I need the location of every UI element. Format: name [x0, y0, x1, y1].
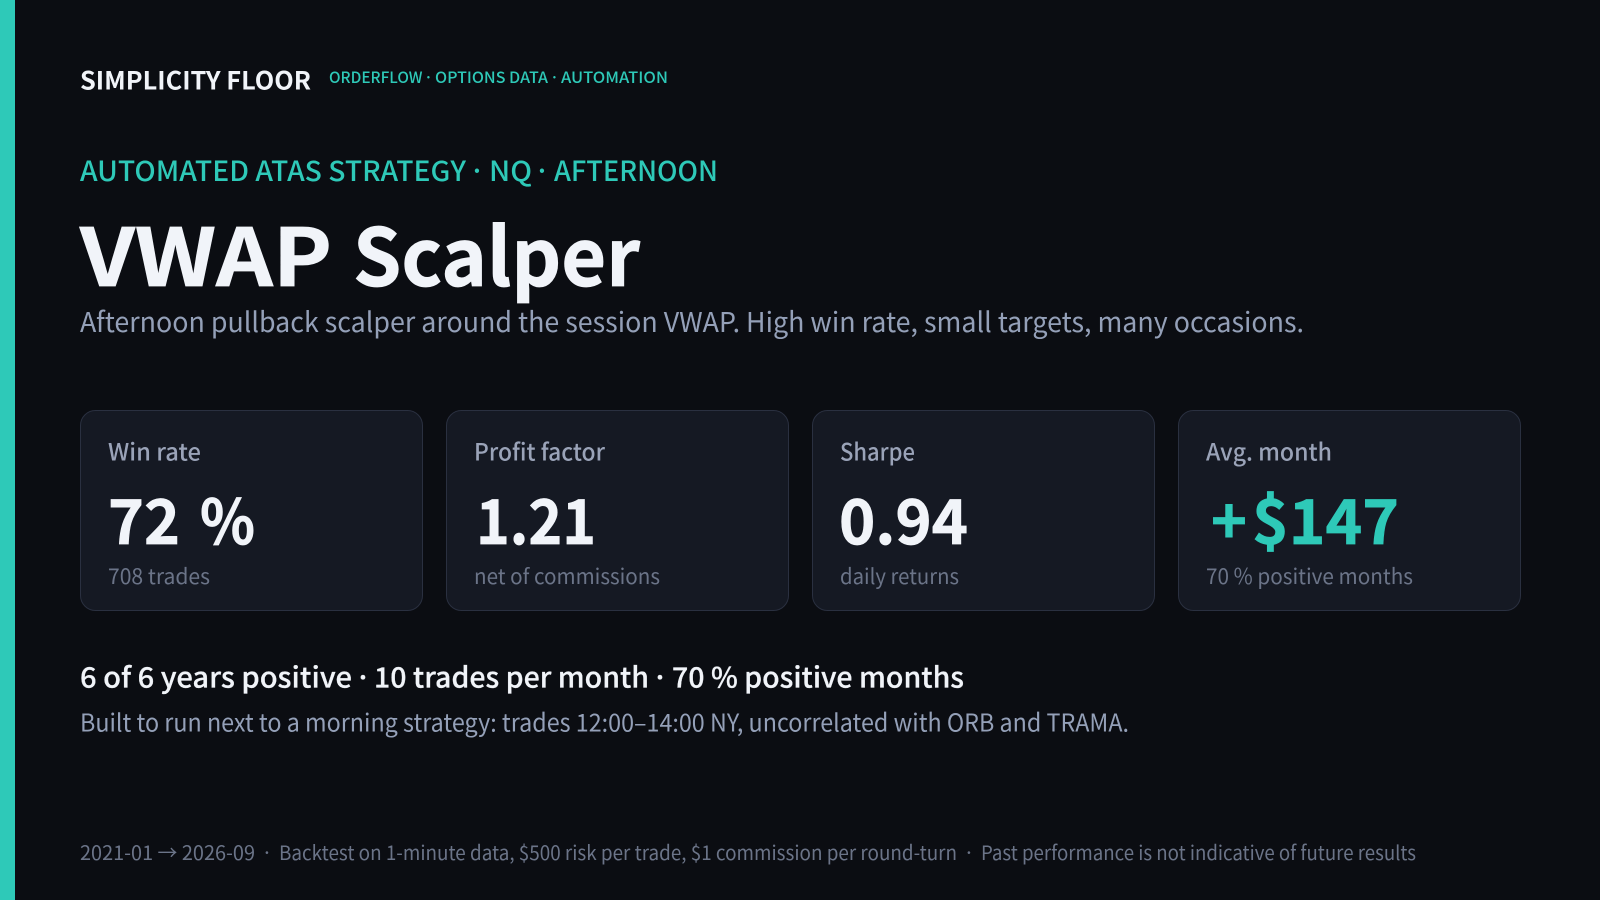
brand name: SIMPLICITY FLOOR	[80, 62, 311, 98]
panel: average month: +	[1211, 472, 1247, 562]
panel: win rate: 708 trades	[108, 560, 210, 591]
panel: average month: $147	[1252, 472, 1399, 562]
highlights line: ·	[652, 656, 668, 696]
panel: average month: 70 % positive months	[1206, 560, 1413, 591]
footer disclaimer	[80, 837, 1416, 866]
kicker: ·	[469, 149, 485, 189]
kicker: AUTOMATED ATAS STRATEGY	[80, 149, 467, 189]
panel: win rate: 72	[108, 472, 180, 562]
panel: average month	[1178, 410, 1520, 610]
panel: profit factor	[446, 410, 788, 610]
panel: win rate	[80, 410, 422, 610]
panel: sharpe: Sharpe	[840, 434, 915, 468]
panel: average month: Avg. month	[1206, 434, 1332, 468]
title	[79, 194, 640, 309]
brand tagline: AUTOMATION	[561, 66, 668, 88]
highlights line: 6 of 6 years positive	[80, 656, 352, 696]
highlights line: 10 trades per month	[374, 656, 649, 696]
highlights line: ·	[355, 656, 371, 696]
panel: win rate: Win rate	[108, 434, 201, 468]
panel: win rate: %	[200, 472, 255, 562]
kicker	[80, 149, 718, 189]
footer disclaimer: ·	[261, 837, 273, 866]
kicker: AFTERNOON	[554, 149, 718, 189]
panel: profit factor: 1.21	[476, 472, 596, 562]
footer disclaimer: Backtest on 1-minute data, $500 risk per trade, $1 commission per round-turn	[279, 837, 957, 866]
panel: sharpe: 0.94	[839, 472, 968, 562]
footer disclaimer: ·	[963, 837, 975, 866]
kicker: NQ	[489, 149, 532, 189]
panel: sharpe: daily returns	[840, 560, 959, 591]
panel: profit factor: net of commissions	[474, 560, 660, 591]
footer disclaimer: 2021-01 → 2026-09	[80, 837, 255, 866]
panel: sharpe	[812, 410, 1154, 610]
brand tagline: OPTIONS DATA	[435, 66, 548, 88]
highlights line	[80, 656, 964, 696]
brand tagline: ·	[550, 66, 559, 88]
description: Built to run next to a morning strategy: trades 12:00–14:00 NY, uncorrelated with ORB and TRAMA.	[80, 704, 1129, 740]
subtitle: Afternoon pullback scalper around the session VWAP. High win rate, small targets, many occasions.	[80, 300, 1304, 340]
accent bar	[0, 0, 15, 900]
title: VWAP	[79, 194, 332, 309]
panel: profit factor: Profit factor	[474, 434, 605, 468]
title: Scalper	[353, 194, 640, 309]
footer disclaimer: Past performance is not indicative of future results	[981, 837, 1416, 866]
brand tagline: ·	[424, 66, 433, 88]
highlights line: 70 % positive months	[672, 656, 964, 696]
brand tagline	[329, 66, 668, 88]
kicker: ·	[534, 149, 550, 189]
brand tagline: ORDERFLOW	[329, 66, 423, 88]
